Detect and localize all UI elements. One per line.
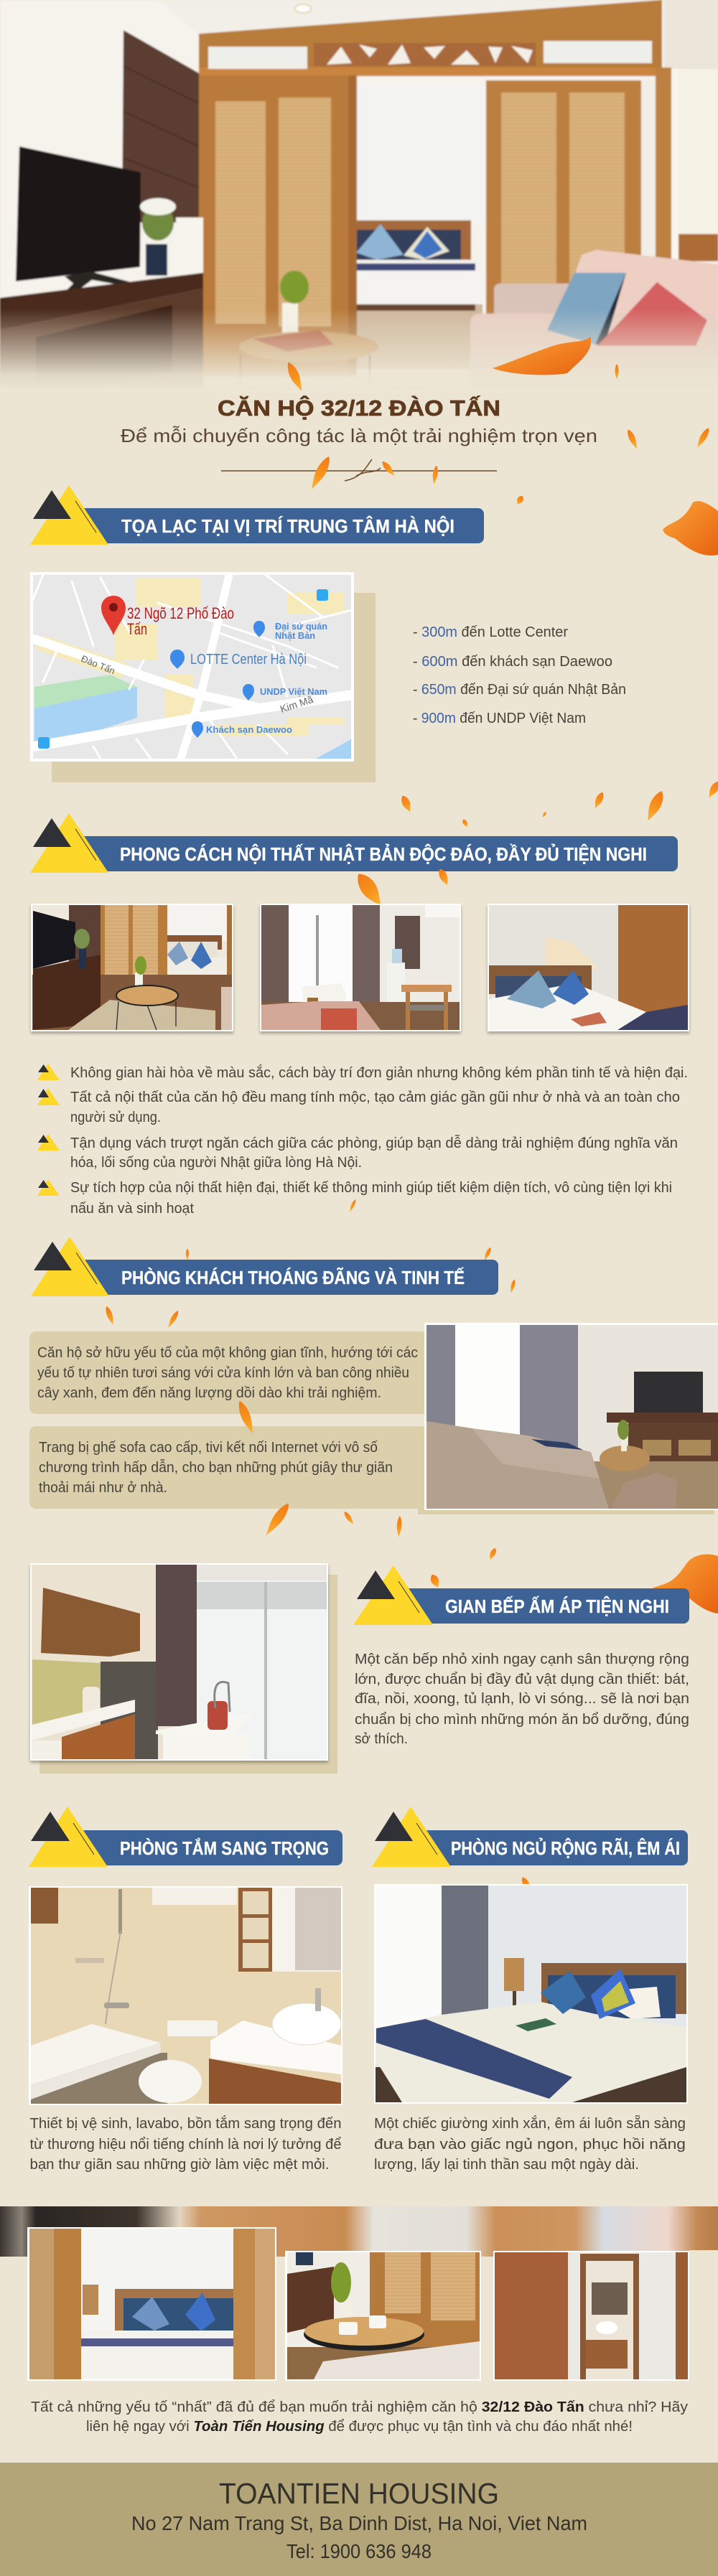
section heading: living room (31, 1237, 498, 1296)
icon: leaf peeking above bedroom photo (520, 1875, 533, 1893)
closing text (31, 2399, 688, 2435)
panel: living room text 2: chương trình hấp dẫn, cho bạn những phút giây thư giãn (39, 1459, 393, 1476)
text: bedroom description (374, 2115, 686, 2173)
photo: door to bathroom (493, 2251, 689, 2381)
list of distances: - 300m đến Lotte Center (413, 624, 568, 640)
section heading: bathroom (29, 1807, 342, 1867)
photo: bedroom with wardrobe (488, 904, 689, 1031)
icon: small leaf (284, 360, 306, 393)
text: bathroom description: bạn thư giãn sau những giờ làm việc mệt mỏi. (30, 2157, 329, 2173)
map pin: UNDP (243, 684, 254, 701)
map label: address (127, 604, 234, 638)
map label: address: 32 Ngõ 12 Phố Đào (127, 604, 234, 622)
map label: Kim Mã: Kim Mã (279, 693, 314, 715)
icon: leaf (541, 811, 547, 818)
section heading: kitchen: GIAN BẾP ẤM ÁP TIỆN NGHI (445, 1596, 669, 1617)
icon: bullet 3 (37, 1134, 60, 1151)
bullet list (37, 1064, 688, 1217)
divider with leaves (221, 454, 497, 492)
section heading: kitchen (353, 1565, 689, 1625)
panel: living room text 1: Căn hộ sở hữu yếu tố của một không gian tĩnh, hướng tới các (37, 1345, 418, 1361)
icon: bullet 2 (37, 1088, 60, 1105)
icon: leaf (462, 818, 470, 828)
panel: living room text 1: yếu tố tự nhiên tươi sáng với cửa kính lớn và ban công nhiều (37, 1365, 409, 1381)
section heading: location: TỌA LẠC TẠI VỊ TRÍ TRUNG TÂM HÀ NỘI (121, 515, 454, 537)
icon: leaf (348, 1199, 357, 1213)
map of location (30, 572, 354, 762)
page-colour patch at strip end (689, 2250, 718, 2257)
map label: address: Tấn (127, 620, 147, 638)
text: kitchen description: lớn, được chuẩn bị đầy đủ vật dụng cần thiết: bát, (355, 1672, 689, 1687)
list of distances (413, 624, 626, 726)
map label: embassy (275, 621, 327, 641)
list of distances: - 650m đến Đại sứ quán Nhật Bản (413, 682, 626, 698)
section heading: living room: PHÒNG KHÁCH THOÁNG ĐÃNG VÀ TINH TẾ (121, 1267, 465, 1288)
text: bathroom description (30, 2115, 342, 2173)
bullet text 2: Tất cả nội thất của căn hộ đều mang tính mộc, tạo cảm giác gần gũi như ở nhà và an toàn cho (70, 1090, 680, 1105)
icon: big leaf at right edge (651, 1555, 718, 1613)
icon: small leaf (694, 426, 712, 449)
bullet text 4: nấu ăn và sinh hoạt (70, 1201, 194, 1217)
icon: large leaf on hero (493, 337, 591, 375)
icon: leaf (262, 1501, 292, 1538)
map label: embassy: Nhật Bản (275, 630, 315, 641)
bullet text 2: người sử dụng. (70, 1110, 161, 1125)
section heading: interior style (30, 813, 678, 873)
closing text: liên hệ ngay với Toàn Tiến Housing để được phục vụ tận tình và chu đáo nhất nhé! (86, 2419, 633, 2435)
photo: bedroom (374, 1884, 688, 2104)
bullet text 2 (70, 1090, 680, 1125)
map pin: Lotte (170, 650, 185, 669)
icon: leaf over panels (236, 1399, 257, 1435)
text: bathroom description: Thiết bị vệ sinh, lavabo, bồn tắm sang trọng đến (30, 2115, 341, 2132)
section heading: bathroom: PHÒNG TẮM SANG TRỌNG (120, 1837, 329, 1859)
text: bathroom description: từ thương hiệu nổi tiếng chính là nơi lý tưởng để (30, 2137, 342, 2153)
map label: Lotte: LOTTE Center Hà Nội (190, 652, 307, 668)
subtitle: Để mỗi chuyến công tác là một trải nghiệm trọn vẹn (121, 425, 597, 446)
icon: leaf (166, 1309, 180, 1329)
bullet text 3 (70, 1135, 678, 1171)
icon: leaf (509, 1279, 516, 1293)
photo shadow panel (418, 1479, 714, 1514)
photo: living room with sofa and tv (424, 1323, 718, 1510)
photo: bathroom (29, 1886, 342, 2105)
photo: kitchen (30, 1563, 328, 1761)
map label: Đào Tấn: Đào Tấn (80, 653, 117, 676)
panel: living room text 2 (29, 1426, 428, 1509)
text: bedroom description: đưa bạn vào giấc ngủ ngon, phục hồi năng (374, 2137, 686, 2153)
map label: UNDP: UNDP Việt Nam (260, 686, 327, 697)
text: kitchen description (355, 1652, 689, 1747)
icon: big leaf at right edge (663, 501, 718, 556)
map label: embassy: Đại sứ quán (275, 621, 327, 632)
map pin: 32 Ngõ 12 (101, 596, 126, 635)
photo: coffee table (285, 2251, 481, 2381)
panel: living room text 1 (29, 1331, 428, 1414)
panel: living room text 2: thoải mái như ở nhà. (39, 1480, 167, 1496)
map pin: embassy (253, 621, 265, 637)
text: kitchen description: Một căn bếp nhỏ xinh ngay cạnh sân thượng rộng (355, 1652, 689, 1667)
list of distances: - 600m đến khách sạn Daewoo (413, 654, 612, 670)
text: kitchen description: sở thích. (355, 1731, 408, 1747)
photo: balcony and kitchen corner (260, 904, 461, 1031)
icon: small leaf (625, 428, 640, 450)
icon: leaf (104, 1306, 116, 1326)
title: CĂN HỘ 32/12 ĐÀO TẤN (218, 395, 500, 421)
icon: leaf (482, 1247, 493, 1261)
icon: leaf (342, 1510, 355, 1526)
bullet text 4: Sự tích hợp của nội thất hiện đại, thiết kế thông minh giúp tiết kiệm diện tích, vô cùng tiện lợi khi (70, 1180, 672, 1196)
bullet text 4 (70, 1180, 672, 1217)
icon: leaf (706, 779, 718, 800)
photo: living room (31, 904, 233, 1031)
icon: leaf (437, 867, 451, 886)
text: bedroom description: Một chiếc giường xinh xắn, êm ái luôn sẵn sàng (374, 2115, 686, 2132)
icon: leaf (429, 1573, 442, 1589)
bullet text 3: hóa, lối sống của người Nhật giữa lòng Hà Nội. (70, 1155, 362, 1171)
footer address: No 27 Nam Trang St, Ba Dinh Dist, Ha Noi, Viet Nam (131, 2512, 587, 2534)
icon: leaf (515, 495, 525, 506)
section heading: location (30, 485, 484, 545)
icon: leaf (396, 1516, 402, 1537)
panel: living room text 1: cây xanh, đem đến năng lượng dồi dào khi trải nghiệm. (37, 1385, 381, 1401)
section heading: bedroom (372, 1807, 688, 1867)
kitchen photo shadow panel (39, 1575, 337, 1774)
icon: leaf (592, 791, 606, 810)
icon: bullet 4 (37, 1179, 60, 1196)
hero fade into page background (0, 309, 718, 391)
footer phone: Tel: 1900 636 948 (286, 2540, 432, 2562)
closing text: Tất cả những yếu tố “nhất” đã đủ để bạn muốn trải nghiệm căn hộ 32/12 Đào Tấn chưa nhỉ? Hãy (31, 2399, 688, 2415)
section heading: interior style: PHONG CÁCH NỘI THẤT NHẬT BẢN ĐỘC ĐÁO, ĐẦY ĐỦ TIỆN NGHI (120, 843, 647, 865)
icon: large leaf (353, 869, 388, 911)
bullet text 3: Tận dụng vách trượt ngăn cách giữa các phòng, giúp bạn dễ dàng trải nghiệm đúng nghĩa văn (70, 1135, 678, 1151)
hero photo: living room with sliding doors (0, 0, 718, 391)
icon: bullet 1 (37, 1064, 60, 1080)
bullet text 1: Không gian hài hòa về màu sắc, cách bày trí đơn giản nhưng không kém phần tinh tế và hiện đại. (70, 1064, 688, 1081)
map shadow panel (52, 593, 376, 782)
icon: small leaf (615, 364, 619, 380)
icon: bus stop (317, 589, 328, 601)
panel: living room text 2: Trang bị ghế sofa cao cấp, tivi kết nối Internet với vô số (39, 1440, 378, 1456)
list of distances: - 900m đến UNDP Việt Nam (413, 711, 586, 726)
icon: leaf (186, 1249, 189, 1260)
icon: leaf (399, 794, 414, 814)
map pin: Daewoo (192, 721, 203, 738)
icon: leaf (643, 789, 667, 823)
footer brand: TOANTIEN HOUSING (219, 2477, 499, 2510)
text: kitchen description: chuẩn bị cho mình những món ăn bổ dưỡng, đúng (355, 1712, 689, 1728)
footer (0, 2463, 718, 2576)
icon: bus stop (38, 737, 50, 749)
map label: Daewoo: Khách sạn Daewoo (206, 724, 292, 735)
photo: bedroom through sliding doors (27, 2227, 276, 2381)
blurred photo strip (0, 2206, 718, 2257)
text: bedroom description: lượng, lấy lại tinh thần sau một ngày dài. (374, 2157, 639, 2173)
text: kitchen description: đĩa, nồi, xoong, tủ lạnh, lò vi sóng... sẽ là nơi bạn (355, 1691, 689, 1707)
icon: leaf (488, 1547, 498, 1561)
